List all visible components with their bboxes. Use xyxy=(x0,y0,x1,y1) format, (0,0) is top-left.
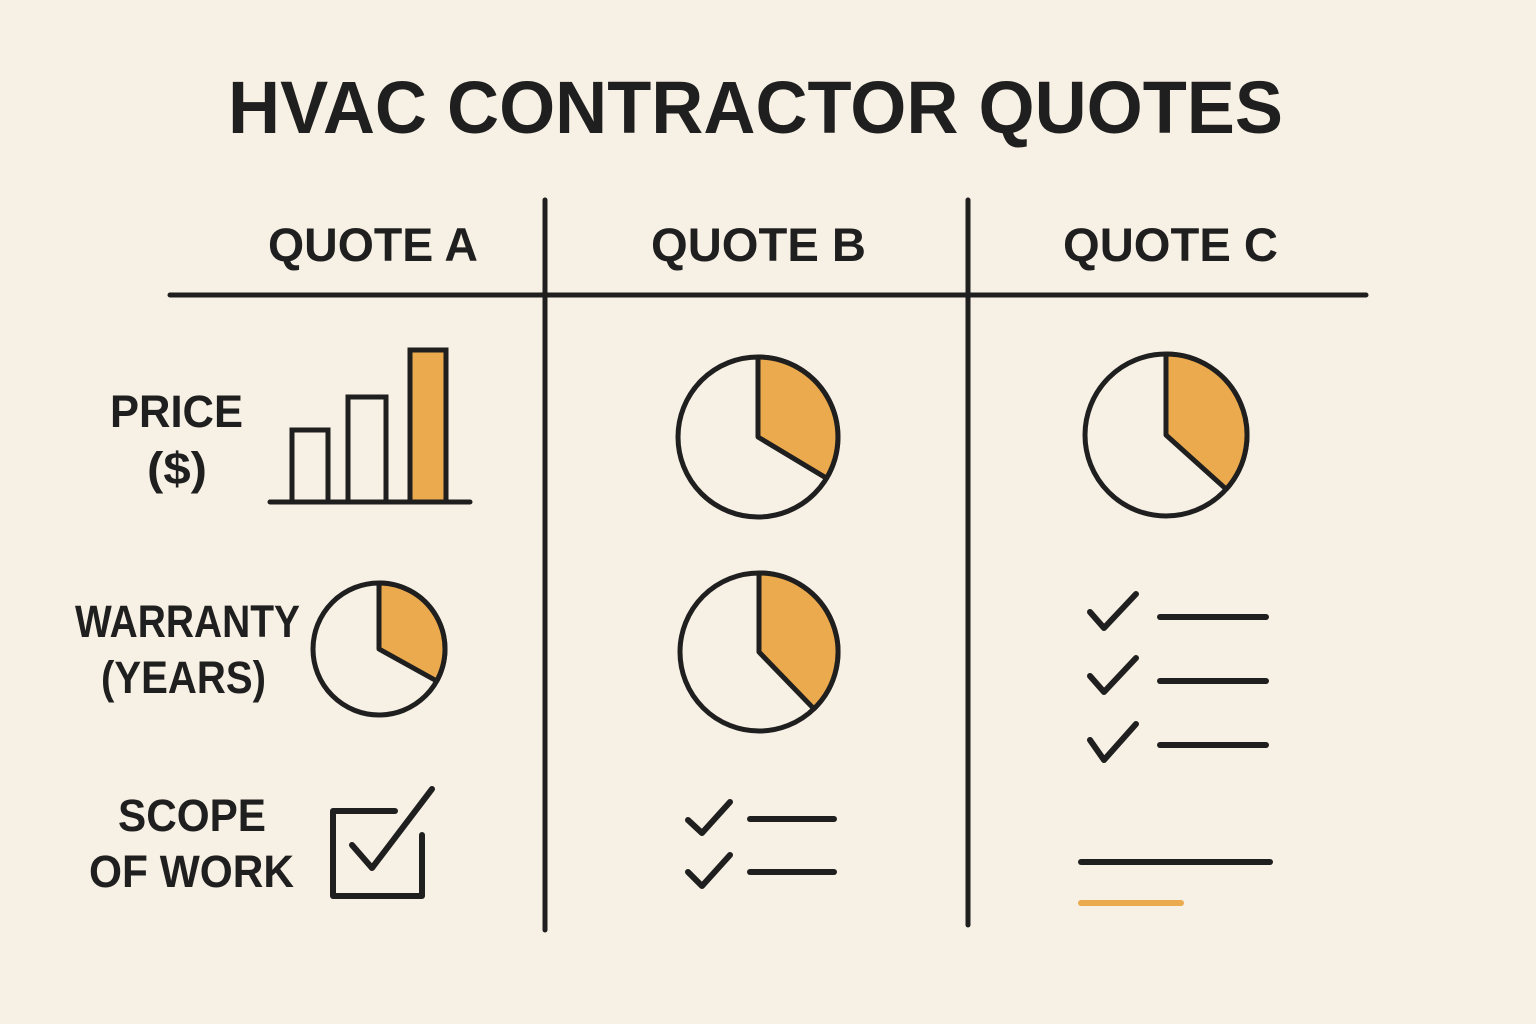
bar chart: quote A price xyxy=(270,350,470,502)
pie: quote C price xyxy=(1085,354,1247,516)
header: Quote B: QUOTE B xyxy=(651,218,866,271)
pie: quote B price xyxy=(678,357,838,517)
label: scope of work: SCOPE xyxy=(118,790,266,841)
label: warranty: (YEARS) xyxy=(101,652,266,703)
lines: quote C scope xyxy=(1081,862,1270,903)
pie: quote B warranty xyxy=(680,573,838,731)
header: Quote A: QUOTE A xyxy=(268,218,478,271)
label: price: PRICE xyxy=(110,386,243,437)
label: scope of work: OF WORK xyxy=(89,846,294,897)
checklist: quote C warranty xyxy=(1090,594,1266,760)
header: Quote C: QUOTE C xyxy=(1063,218,1278,271)
checklist: quote B scope xyxy=(688,802,834,886)
title: HVAC CONTRACTOR QUOTES xyxy=(228,66,1283,149)
label: price xyxy=(110,386,243,494)
label: warranty xyxy=(75,596,300,703)
label: scope of work xyxy=(89,790,294,897)
checkbox: quote A scope xyxy=(333,789,432,896)
label: price: ($) xyxy=(147,443,207,494)
pie: quote A warranty xyxy=(313,583,445,715)
label: warranty: WARRANTY xyxy=(75,596,300,647)
